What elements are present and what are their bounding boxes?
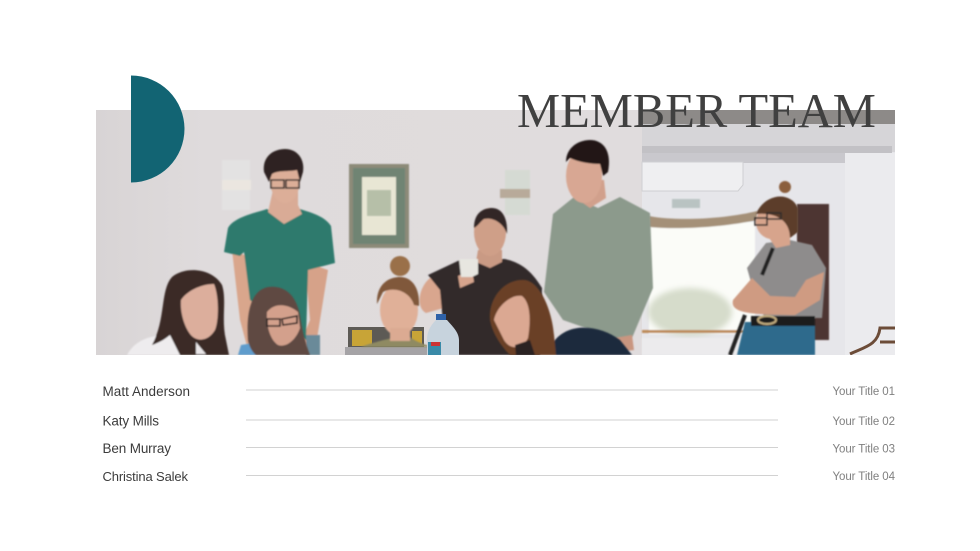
row 4: Christina Salek: Christina Salek — [102, 469, 188, 484]
decorative teal half circle — [131, 76, 184, 182]
framed picture — [349, 164, 409, 248]
person: woman with auburn hair and navy jacket — [490, 280, 632, 355]
row 4: Christina Salek: Your Title 04 — [832, 471, 896, 483]
infographic slide — [96, 76, 895, 481]
row 1: Matt Anderson: Matt Anderson — [102, 384, 190, 399]
person: woman in black top holding mug — [420, 208, 542, 355]
desk boxes and laptop — [345, 327, 427, 355]
row 3: Ben Murray: Your Title 03 — [832, 444, 895, 456]
team list — [102, 384, 896, 484]
water bottle — [427, 314, 459, 355]
team photo illustration — [96, 110, 895, 355]
row 1: Matt Anderson: Your Title 01 — [832, 386, 895, 398]
row 2: Katy Mills — [102, 414, 895, 428]
row 3: Ben Murray: Ben Murray — [102, 441, 171, 456]
chair — [850, 328, 895, 354]
title: MEMBER TEAM — [517, 85, 876, 138]
row 2: Katy Mills: Katy Mills — [102, 414, 159, 428]
row 2: Katy Mills: Your Title 02 — [832, 416, 895, 428]
person: woman with glasses seated — [238, 287, 310, 355]
wall and room background — [96, 110, 895, 355]
row 3: Ben Murray — [102, 441, 895, 456]
row 1: Matt Anderson — [102, 384, 895, 399]
window with curtain — [642, 199, 757, 355]
person: woman with glasses at right — [730, 181, 826, 355]
person: woman with hair bun — [360, 256, 432, 347]
dark wood cabinet — [797, 204, 829, 340]
wall lamp left — [222, 180, 250, 190]
person: man in green t-shirt — [224, 149, 335, 355]
wall lamp right — [500, 170, 530, 215]
person: woman with long dark hair — [127, 270, 229, 355]
row 4: Christina Salek — [102, 469, 896, 484]
air conditioner — [642, 162, 743, 191]
person: man in grey sweater — [544, 140, 653, 352]
